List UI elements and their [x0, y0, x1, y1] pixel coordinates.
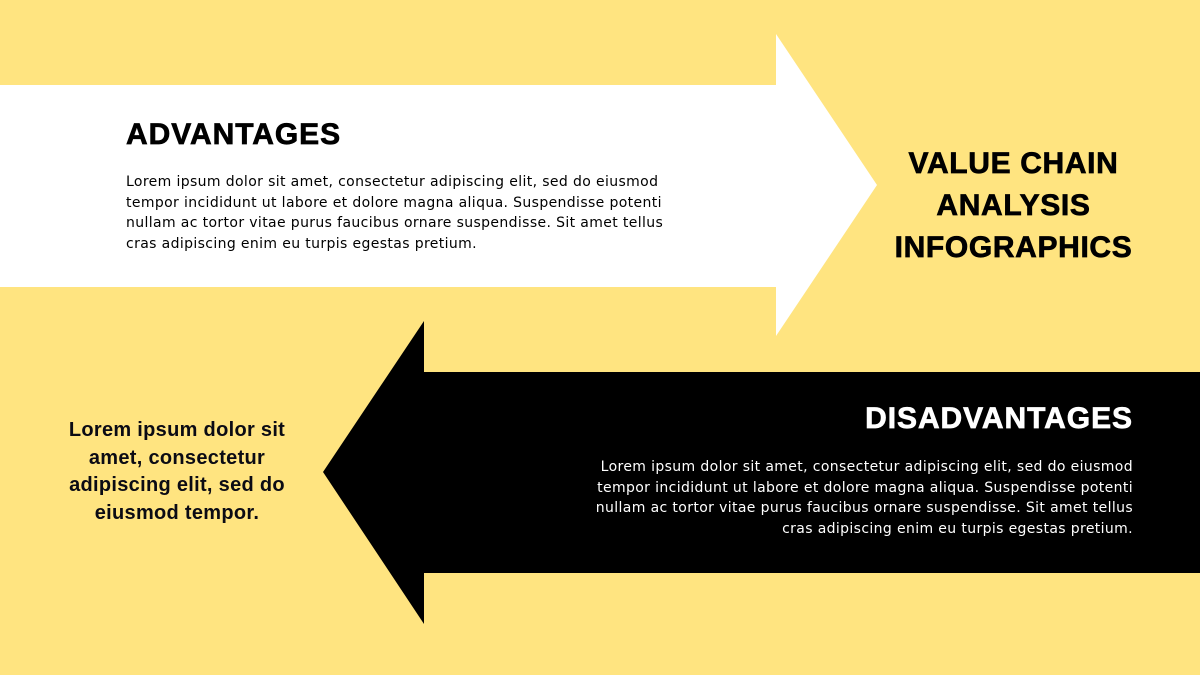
title: INFOGRAPHICS [895, 231, 1132, 264]
title: VALUE CHAIN [909, 147, 1118, 180]
text block: disadvantages [596, 459, 1133, 537]
callout text: adipiscing elit, sed do [69, 474, 285, 496]
text block: advantages [126, 174, 663, 252]
heading: advantages: ADVANTAGES [126, 118, 341, 151]
title: ANALYSIS [936, 189, 1091, 222]
callout text: Lorem ipsum dolor sit [69, 419, 285, 441]
text block: advantages: Lorem ipsum dolor sit amet, consectetur adipiscing elit, sed do eiusmod [126, 174, 658, 190]
text block: disadvantages: nullam ac tortor vitae purus faucibus ornare suspendisse. Sit amet tellus [596, 500, 1133, 516]
text block: advantages: tempor incididunt ut labore et dolore magna aliqua. Suspendisse potenti [126, 195, 662, 211]
heading: disadvantages: DISADVANTAGES [865, 402, 1133, 435]
text block: advantages: nullam ac tortor vitae purus faucibus ornare suspendisse. Sit amet tellus [126, 215, 663, 231]
callout text: eiusmod tempor. [95, 502, 259, 524]
text block: advantages: cras adipiscing enim eu turpis egestas pretium. [126, 236, 477, 252]
title [895, 147, 1132, 264]
text block: disadvantages: cras adipiscing enim eu turpis egestas pretium. [782, 521, 1133, 537]
text block: disadvantages: tempor incididunt ut labore et dolore magna aliqua. Suspendisse potenti [597, 480, 1133, 496]
text block: disadvantages: Lorem ipsum dolor sit amet, consectetur adipiscing elit, sed do eiusmod [601, 459, 1133, 475]
callout text [69, 419, 285, 524]
callout text: amet, consectetur [89, 447, 265, 469]
